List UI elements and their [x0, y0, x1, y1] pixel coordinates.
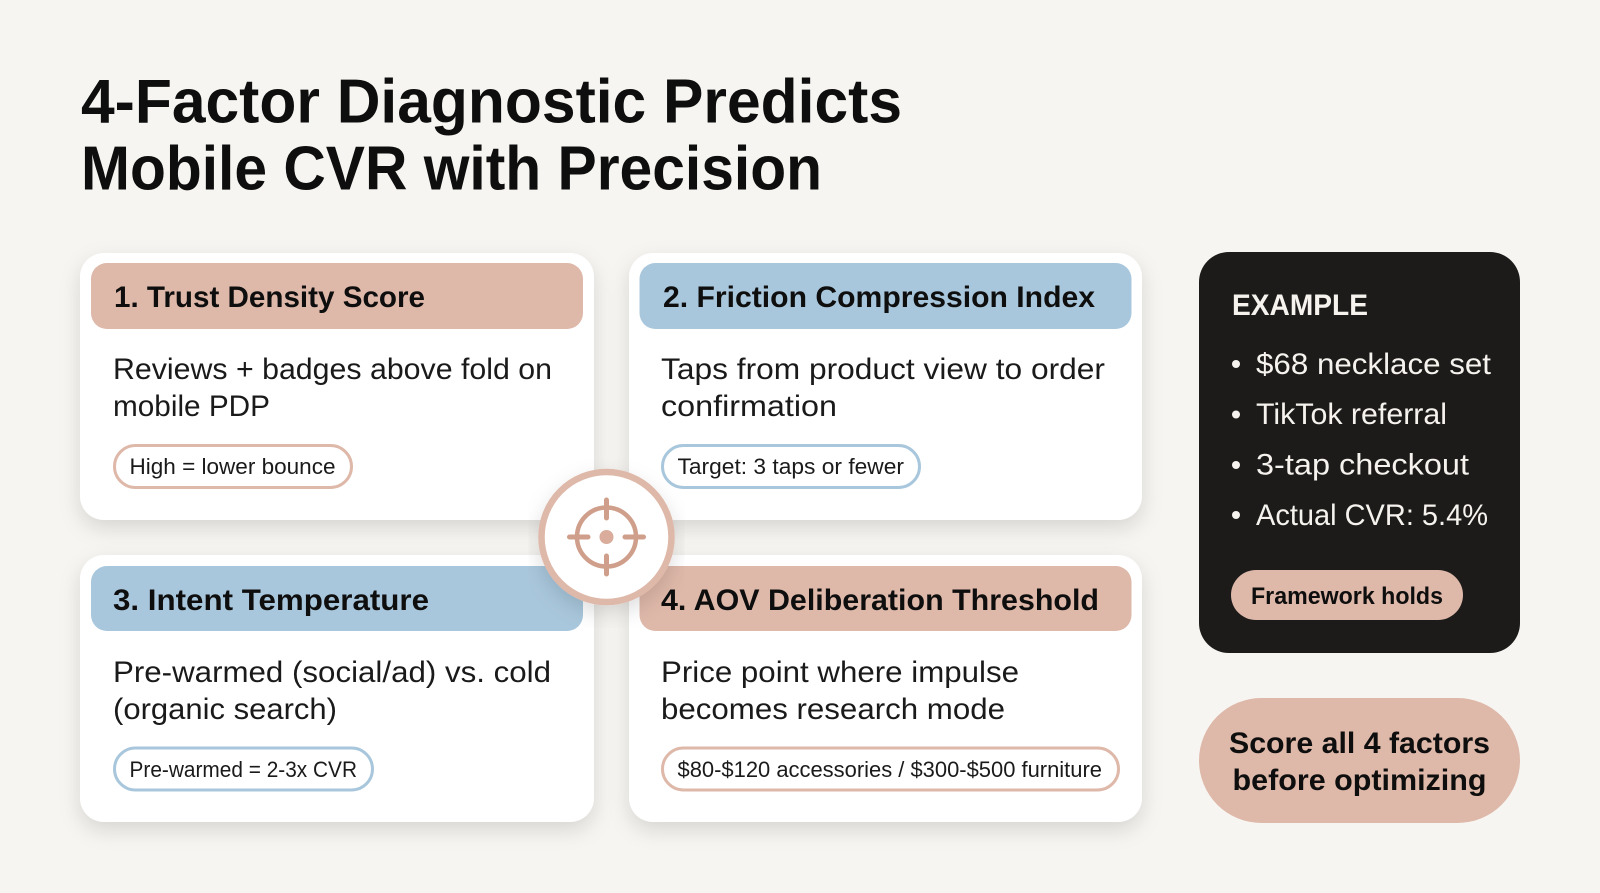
panel: 2. Friction Compression Index — [629, 253, 1142, 520]
header: Trust Density Score — [91, 263, 583, 329]
header: AOV Deliberation Threshold — [640, 566, 1132, 631]
description — [661, 656, 1019, 726]
pill: Target: 3 taps or fewer: Target: 3 taps or fewer — [678, 454, 904, 479]
header: AOV Deliberation Threshold: 4. AOV Deliberation Threshold — [661, 584, 1099, 617]
title: 4-Factor Diagnostic Predicts — [81, 68, 902, 136]
example list — [1232, 348, 1492, 532]
title — [81, 68, 902, 204]
description: mobile PDP — [113, 390, 270, 423]
panel: 4. AOV Deliberation Threshold — [629, 555, 1142, 822]
panel: 3. Intent Temperature — [80, 555, 594, 822]
header: Intent Temperature — [91, 566, 583, 631]
pill: Target: 3 taps or fewer — [662, 446, 920, 488]
description — [113, 353, 552, 423]
description: Pre-warmed (social/ad) vs. cold — [113, 656, 551, 689]
callout: score all factors — [1199, 698, 1520, 823]
description — [113, 656, 551, 726]
header: Friction Compression Index: 2. Friction Compression Index — [663, 281, 1095, 314]
example list: $68 necklace set — [1256, 348, 1492, 381]
example heading: EXAMPLE — [1232, 289, 1368, 322]
pill: price thresholds — [662, 748, 1118, 790]
example list: TikTok referral — [1256, 398, 1447, 431]
panel: example — [1199, 252, 1520, 653]
pill: Pre-warmed = 2-3x CVR: Pre-warmed = 2-3x CVR — [130, 757, 357, 782]
callout: score all factors: before optimizing — [1232, 764, 1486, 797]
description: (organic search) — [113, 693, 337, 726]
pill: price thresholds: $80-$120 accessories / $300-$500 furniture — [678, 757, 1102, 782]
pill: High = lower bounce — [114, 446, 352, 488]
header: Friction Compression Index — [640, 263, 1132, 329]
description: Taps from product view to order — [661, 353, 1105, 386]
description — [661, 353, 1105, 423]
pill: High = lower bounce: High = lower bounce — [130, 454, 336, 479]
example list: 3-tap checkout — [1256, 448, 1470, 482]
title: Mobile CVR with Precision — [81, 134, 822, 204]
description: Reviews + badges above fold on — [113, 353, 552, 386]
description: confirmation — [661, 390, 837, 423]
description: Price point where impulse — [661, 656, 1019, 689]
panel: 1. Trust Density Score — [80, 253, 594, 520]
icon: target crosshair badge — [542, 472, 672, 602]
description: becomes research mode — [661, 693, 1005, 726]
callout: score all factors: Score all 4 factors — [1229, 727, 1490, 760]
badge: framework holds — [1231, 570, 1463, 620]
badge: framework holds: Framework holds — [1251, 583, 1443, 610]
header: Intent Temperature: 3. Intent Temperature — [113, 584, 429, 617]
example list: Actual CVR: 5.4% — [1256, 499, 1488, 532]
header: Trust Density Score: 1. Trust Density Score — [114, 281, 425, 314]
pill: Pre-warmed = 2-3x CVR — [114, 748, 372, 790]
